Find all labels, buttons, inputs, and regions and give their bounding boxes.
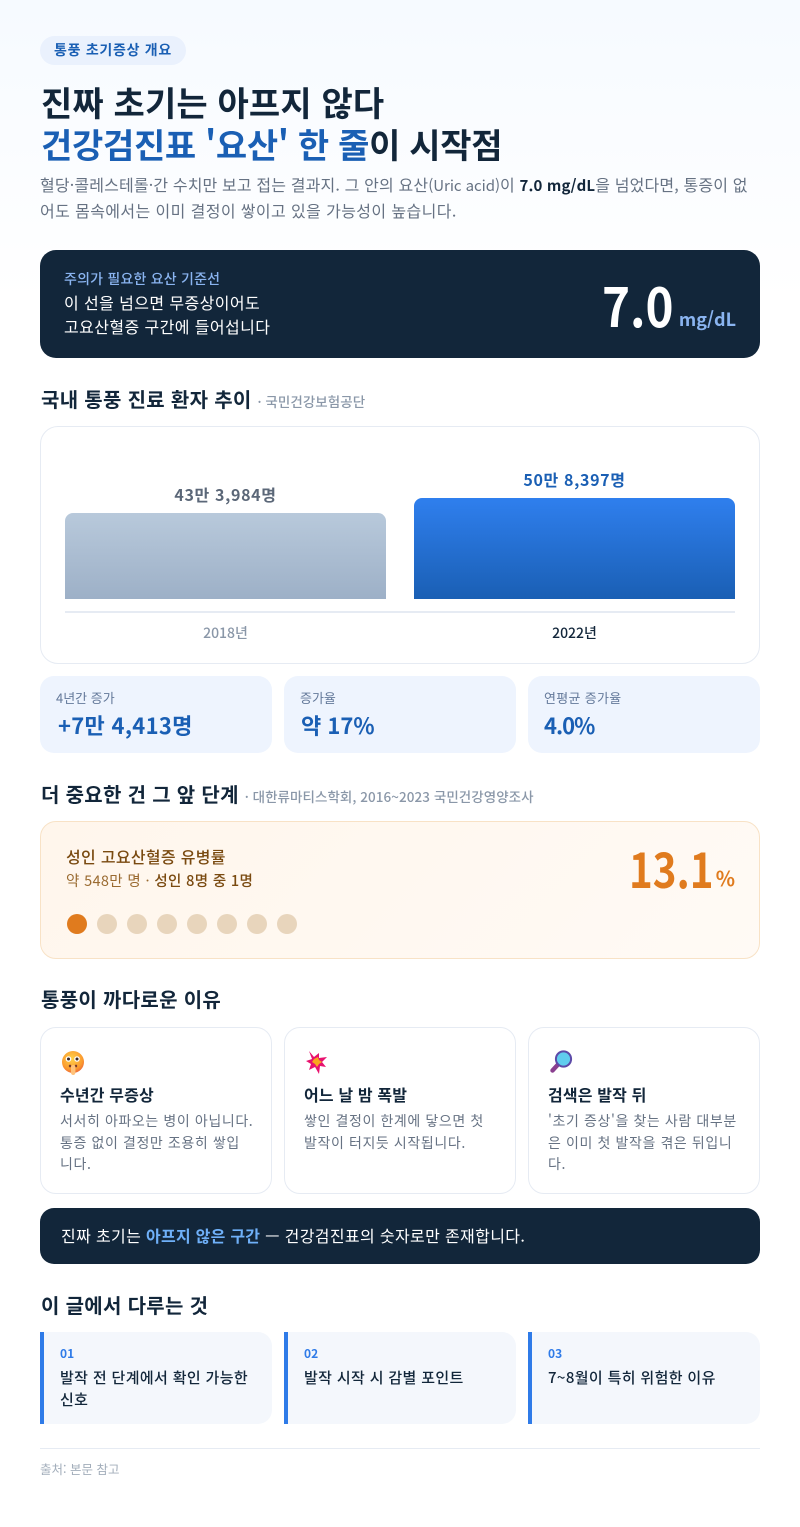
item text: 발작 전 단계에서 확인 가능한 [60, 1367, 248, 1388]
item number: 02 [304, 1345, 318, 1362]
card title: 검색은 발작 뒤 [548, 1082, 646, 1106]
card: silent years [40, 1027, 272, 1194]
item 03 [528, 1332, 760, 1424]
axis [65, 611, 735, 613]
card text: 쌓인 결정이 한계에 닿으면 첫 [304, 1111, 484, 1131]
title [41, 77, 502, 168]
icon: shushing face [62, 1051, 84, 1075]
card text: 은 이미 첫 발작을 겪은 뒤입니 [548, 1133, 732, 1153]
bar 2018 [65, 513, 386, 599]
prevalence title: 성인 고요산혈증 유병률 [66, 844, 226, 868]
item 01 [40, 1332, 272, 1424]
card text: 다. [548, 1154, 566, 1174]
stat: growth rate [284, 676, 516, 753]
stat: annual growth [528, 676, 760, 753]
intro text [40, 172, 748, 222]
title: 건강검진표 '요산' 한 줄이 시작점 [41, 119, 502, 168]
threshold description: 이 선을 넘으면 무증상이어도 [64, 290, 260, 314]
card text [60, 1111, 253, 1174]
intro text: 혈당·콜레스테롤·간 수치만 보고 접는 결과지. 그 안의 요산(Uric acid)이 7.0 mg/dL을 넘었다면, 통증이 없 [40, 172, 748, 196]
callout [40, 1208, 760, 1264]
icon: magnifier [550, 1050, 572, 1073]
card text: '초기 증상'을 찾는 사람 대부분 [548, 1111, 737, 1131]
callout: 진짜 초기는 아프지 않은 구간 — 건강검진표의 숫자로만 존재합니다. [61, 1223, 525, 1247]
stat: growth rate: 약 17% [301, 709, 375, 741]
stat: 4-year increase [40, 676, 272, 753]
item text: 7~8월이 특히 위험한 이유 [548, 1367, 716, 1388]
year 2018: 2018년 [203, 623, 248, 643]
prevalence value: 13.1 [629, 832, 714, 902]
panel: bar chart [40, 426, 760, 664]
stat: annual growth: 4.0% [544, 709, 594, 741]
threshold unit: mg/dL [679, 306, 736, 332]
card text: 니다. [60, 1154, 91, 1174]
source note: 출처: 본문 참고 [40, 1459, 120, 1478]
card title: 어느 날 밤 폭발 [304, 1082, 407, 1106]
stat: annual growth: 연평균 증가율 [544, 688, 622, 707]
bar 2022 [414, 498, 735, 599]
card text: 통증 없이 결정만 조용히 쌓입 [60, 1133, 240, 1153]
intro text: 어도 몸속에서는 이미 결정이 쌓이고 있을 가능성이 높습니다. [40, 198, 457, 222]
value label 2022: 50만 8,397명 [523, 467, 626, 491]
threshold description: 고요산혈증 구간에 들어섭니다 [64, 314, 270, 338]
stat: 4-year increase: 4년간 증가 [56, 688, 115, 707]
item number: 03 [548, 1345, 562, 1362]
dot scale: 1 in 8 [67, 914, 297, 934]
card title: 수년간 무증상 [60, 1082, 154, 1106]
threshold label: 주의가 필요한 요산 기준선 [64, 269, 220, 289]
card text: 발작이 터지듯 시작됩니다. [304, 1133, 466, 1153]
stat: growth rate: 증가율 [300, 688, 336, 707]
card text [548, 1111, 737, 1174]
card text [304, 1111, 484, 1153]
threshold value: 7.0 [602, 264, 674, 343]
stat: 4-year increase: +7만 4,413명 [58, 709, 193, 741]
tag pill: 통풍 초기증상 개요 [54, 40, 172, 60]
item number: 01 [60, 1345, 74, 1362]
item 02 [284, 1332, 516, 1424]
icon: explosion [306, 1051, 327, 1074]
value label 2018: 43만 3,984명 [174, 482, 277, 506]
year 2022: 2022년 [552, 623, 597, 643]
item text: 신호 [60, 1389, 88, 1410]
prevalence description: 약 548만 명 · 성인 8명 중 1명 [66, 870, 253, 891]
card: sudden attack [284, 1027, 516, 1194]
card: search after attack [528, 1027, 760, 1194]
tag pill [40, 36, 186, 65]
heading: patient trend: 국내 통풍 진료 환자 추이 · 국민건강보험공단 [41, 384, 365, 413]
heading: earlier stage: 더 중요한 건 그 앞 단계 · 대한류마티스학회, 2016~2023 국민건강영양조사 [41, 779, 534, 808]
panel: prevalence [40, 821, 760, 959]
item text [60, 1367, 248, 1410]
footer divider [40, 1448, 760, 1449]
heading: contents: 이 글에서 다루는 것 [41, 1290, 208, 1319]
prevalence unit: % [716, 863, 735, 892]
title: 진짜 초기는 아프지 않다 [41, 77, 384, 126]
panel: threshold [40, 250, 760, 358]
threshold description [64, 290, 270, 338]
card text: 서서히 아파오는 병이 아닙니다. [60, 1111, 253, 1131]
heading: why tricky: 통풍이 까다로운 이유 [41, 984, 221, 1013]
item text: 발작 시작 시 감별 포인트 [304, 1367, 464, 1388]
